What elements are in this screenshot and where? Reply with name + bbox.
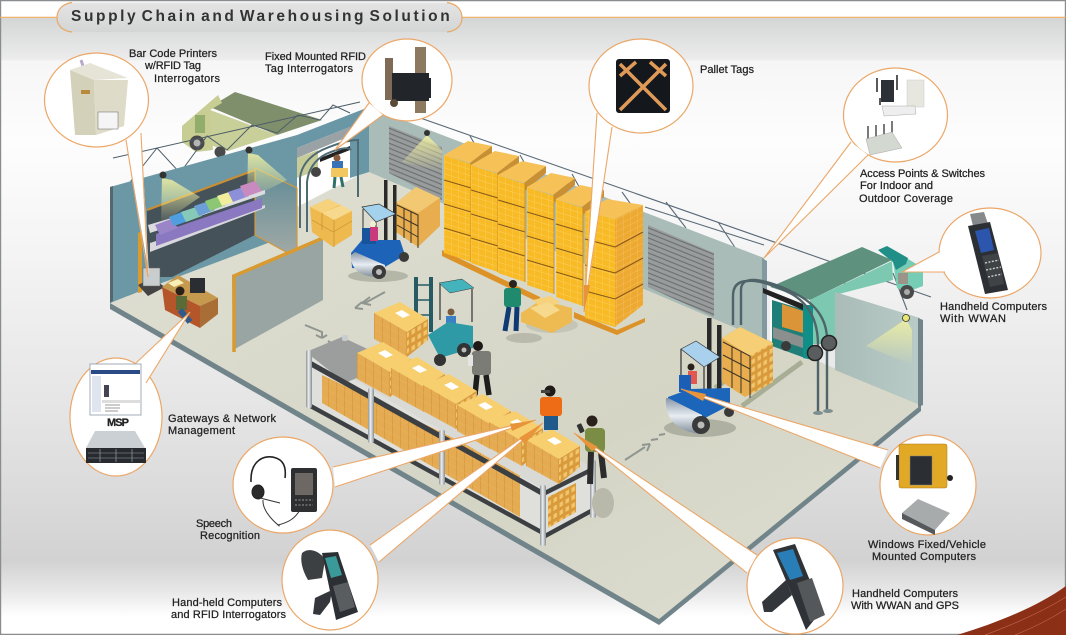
label: access points: For Indoor and bbox=[860, 180, 933, 192]
roller table bbox=[306, 335, 596, 546]
callout: handheld WWAN bbox=[902, 208, 1041, 298]
label: gateways bbox=[168, 413, 276, 437]
rolling door: back bbox=[389, 126, 442, 200]
dock tracks bbox=[715, 348, 802, 406]
tail tip bbox=[681, 389, 706, 401]
icon: server bbox=[86, 431, 146, 463]
worker: orange shirt bbox=[540, 386, 562, 430]
lamps: left wall bbox=[160, 146, 287, 224]
callout: bar code printer bbox=[44, 53, 149, 277]
label: handheld GPS bbox=[851, 588, 959, 612]
label: access points: Outdoor Coverage bbox=[859, 193, 953, 205]
label: handheld WWAN: Handheld Computers bbox=[940, 301, 1048, 313]
label: speech: Speech bbox=[196, 518, 232, 530]
icon: tag bbox=[616, 59, 670, 113]
label: gateways: Gateways & Network bbox=[168, 413, 276, 425]
printer station bbox=[138, 268, 165, 296]
desk bbox=[162, 275, 218, 328]
label: speech: Recognition bbox=[200, 530, 260, 542]
label: handheld GPS: With WWAN and GPS bbox=[851, 600, 959, 612]
forklift: teal bbox=[414, 277, 474, 366]
forklift: front blue bbox=[664, 318, 773, 437]
icon: gray module bbox=[902, 499, 950, 535]
icon: RFID gun bbox=[301, 550, 358, 620]
label: bar code printers: w/RFID Tag bbox=[144, 60, 201, 72]
label: handheld GPS: Handheld Computers bbox=[852, 588, 958, 600]
floor arrows bbox=[305, 292, 665, 460]
label: windows: Windows Fixed/Vehicle bbox=[868, 539, 986, 551]
label: fixed RFID: Tag Interrogators bbox=[265, 63, 354, 75]
label: fixed RFID: Fixed Mounted RFID bbox=[265, 51, 366, 63]
label: hand-held RFID: and RFID Interrogators bbox=[171, 609, 286, 621]
right dock door bbox=[733, 280, 836, 415]
icon: MSP label: MSP bbox=[107, 417, 129, 429]
tail tip bbox=[574, 433, 598, 451]
label: handheld WWAN: With WWAN bbox=[940, 313, 1006, 325]
orange wall strip bbox=[138, 231, 142, 293]
callout: access points bbox=[764, 68, 948, 258]
pallet stack bbox=[442, 141, 645, 335]
icon: mobile computer bbox=[968, 212, 1008, 294]
shelf back bbox=[147, 170, 255, 277]
callout: RFID handheld bbox=[282, 423, 543, 630]
right truck bbox=[770, 246, 923, 360]
label: access points bbox=[859, 168, 986, 205]
icon: headset bbox=[251, 457, 300, 526]
back left truck bbox=[182, 92, 322, 158]
callout: GPS handheld bbox=[574, 433, 843, 634]
forklift: back blue bbox=[348, 180, 440, 282]
label: bar code printers bbox=[129, 48, 220, 85]
header rule bbox=[0, 16, 1066, 18]
label: pallet tags: Pallet Tags bbox=[700, 64, 754, 76]
small boxes on pallet bbox=[521, 296, 578, 333]
boxes by teal forklift bbox=[374, 302, 428, 357]
label: hand-held RFID bbox=[171, 597, 286, 621]
label: windows: Mounted Computers bbox=[872, 551, 976, 563]
callout: speech recognition bbox=[233, 420, 536, 533]
label: speech bbox=[196, 518, 260, 542]
icon: yellow vehicle computer bbox=[896, 444, 953, 488]
label: handheld WWAN bbox=[940, 301, 1048, 325]
icon: RFID portal bbox=[385, 47, 431, 113]
callout: gateways bbox=[70, 312, 190, 476]
warehouse floor bbox=[110, 170, 921, 625]
right wall section bbox=[835, 292, 920, 405]
left wall bbox=[110, 135, 297, 303]
icon: access points bbox=[866, 75, 924, 155]
corner swoosh bbox=[957, 586, 1066, 635]
icon: PDA bbox=[291, 468, 317, 512]
lamp: right wall bbox=[866, 314, 912, 365]
title bbox=[57, 2, 462, 32]
label: bar code printers: Bar Code Printers bbox=[129, 48, 218, 60]
label: gateways: Management bbox=[168, 425, 235, 437]
worker: grey shirt bbox=[468, 341, 491, 395]
icon: printer bbox=[70, 60, 128, 135]
rolling door: centre bbox=[648, 225, 714, 317]
callout: vehicle computers bbox=[681, 389, 976, 535]
back wall bbox=[369, 107, 764, 340]
label: access points: Access Points & Switches bbox=[860, 168, 986, 180]
truss: right bbox=[369, 100, 931, 310]
label: hand-held RFID: Hand-held Computers bbox=[172, 597, 282, 609]
title: Supply Chain and Warehousing Solution bbox=[71, 8, 452, 25]
callout: fixed RFID bbox=[335, 39, 452, 150]
label: fixed RFID bbox=[265, 51, 366, 75]
worker: olive shirt bbox=[576, 416, 614, 518]
tail tip bbox=[519, 423, 543, 444]
icon: MSP screen bbox=[90, 364, 141, 415]
boxes on table bbox=[357, 342, 580, 484]
tail tip bbox=[584, 285, 590, 312]
door opening: left bbox=[297, 127, 358, 232]
truss: left bbox=[113, 102, 360, 186]
partition wall bbox=[232, 237, 323, 352]
shirt display bbox=[148, 181, 265, 252]
callout: pallet tags bbox=[584, 39, 693, 312]
tail tip bbox=[510, 420, 536, 431]
worker at door bbox=[331, 154, 348, 188]
glass panel bbox=[255, 168, 297, 258]
worker: green shirt bbox=[504, 280, 542, 343]
label: windows bbox=[868, 539, 986, 563]
label: bar code printers: Interrogators bbox=[154, 73, 220, 85]
lamp: back wall bbox=[402, 130, 442, 172]
loose box pile bbox=[310, 199, 352, 247]
icon: gun computer bbox=[762, 544, 825, 630]
